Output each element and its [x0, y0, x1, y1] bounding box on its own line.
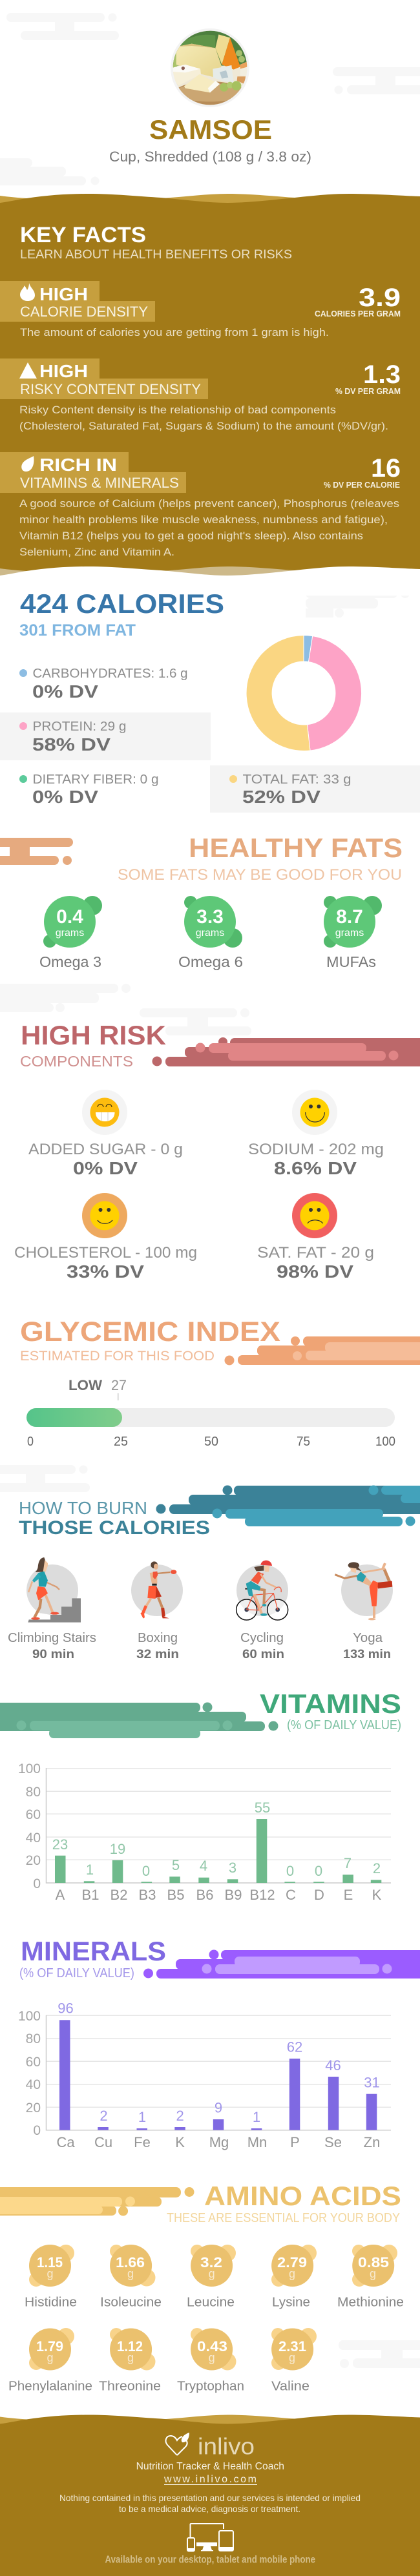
amino: isoleucine: g: [127, 2267, 134, 2280]
amino: histidine: 1.15: [37, 2254, 63, 2270]
activity: boxing: [131, 1561, 183, 1661]
bar chart: vitamins: D: [314, 1887, 324, 1903]
amino: histidine: Histidine: [25, 2296, 77, 2310]
fact: rich in vitamins and minerals: minor health problems like muscle weakness, numbness and fatigue),: [19, 514, 388, 526]
panel: high risk components: [14, 1020, 420, 1282]
panel: vitamins: [0, 1688, 401, 1903]
bar chart: vitamins: B6: [196, 1887, 213, 1903]
bubble: omega 3: Omega 3: [39, 953, 101, 970]
amino: histidine: g: [47, 2267, 54, 2280]
component: added sugar: [28, 1090, 183, 1178]
amino: phenylalanine: 1.79: [36, 2338, 63, 2354]
bar chart: minerals: 96: [58, 2000, 74, 2017]
bar chart: minerals: 1: [138, 2109, 146, 2125]
bar chart: minerals: 100: [18, 2009, 41, 2024]
subheading: ESTIMATED FOR THIS FOOD: [20, 1349, 215, 1364]
heading: how to burn: HOW TO BURN: [19, 1498, 147, 1518]
macro: total fat: TOTAL FAT: 33 g: [243, 773, 352, 787]
bar chart: vitamins: B12: [249, 1887, 275, 1903]
gauge scale: 25: [114, 1435, 128, 1449]
bar chart: minerals: 2: [176, 2108, 184, 2124]
bar chart: vitamins: 0: [33, 1876, 41, 1891]
amino: leucine: 3.2: [200, 2254, 222, 2270]
bar chart: vitamins: 20: [26, 1853, 41, 1868]
amino: methionine: g: [370, 2267, 376, 2280]
fact: rich in vitamins and minerals: A good source of Calcium (helps prevent cancer), Phosphorus (releaves: [19, 497, 399, 510]
amino: phenylalanine: Phenylalanine: [8, 2380, 92, 2394]
macro: total fat: 52% DV: [242, 787, 320, 807]
panel: footer: [0, 2415, 420, 2576]
disclaimer: [59, 2493, 361, 2514]
amino: phenylalanine: [8, 2328, 92, 2394]
bubble: omega 6: [178, 896, 243, 970]
subheading: (% OF DAILY VALUE): [287, 1718, 401, 1732]
gauge scale: 75: [297, 1435, 310, 1449]
bubble: omega 3: [39, 896, 102, 970]
heading: healthy fats: HEALTHY FATS: [189, 833, 403, 863]
bar chart: vitamins: 3: [229, 1860, 236, 1876]
gauge scale: [27, 1435, 395, 1449]
amino: tryptophan: Tryptophan: [177, 2380, 244, 2394]
subheading: SOME FATS MAY BE GOOD FOR YOU: [118, 866, 402, 884]
amino: phenylalanine: g: [47, 2351, 54, 2364]
macro: carbohydrates: [19, 667, 187, 701]
fact: calorie density: CALORIES PER GRAM: [315, 309, 401, 318]
bar chart: vitamins: 5: [172, 1857, 180, 1873]
fact: risky content density: (Cholesterol, Saturated Fat, Sugars & Sodium) to the amount (%DV/gr).: [19, 420, 388, 432]
heading: key facts: KEY FACTS: [20, 223, 146, 247]
serving size: Cup, Shredded (108 g / 3.8 oz): [109, 149, 311, 165]
bar chart: minerals: Se: [324, 2134, 342, 2150]
amino: leucine: Leucine: [187, 2296, 235, 2310]
fact: risky content density: % DV PER GRAM: [335, 386, 401, 396]
amino: valine: [271, 2328, 317, 2394]
macro: protein: [0, 712, 211, 760]
bar chart: vitamins: B9: [225, 1887, 242, 1903]
fact: calorie density: HIGH: [39, 284, 88, 304]
tagline: Nutrition Tracker & Health Coach: [136, 2461, 284, 2472]
component: saturated fat: SAT. FAT - 20 g: [257, 1244, 374, 1262]
amino: tryptophan: 0.43: [197, 2338, 227, 2354]
bar chart: vitamins: 0: [286, 1863, 294, 1879]
bar chart: minerals: 9: [215, 2100, 222, 2116]
subheading: LEARN ABOUT HEALTH BENEFITS OR RISKS: [20, 248, 292, 262]
heading: vitamins: VITAMINS: [260, 1688, 401, 1719]
bubble: omega 6: Omega 6: [178, 953, 243, 970]
macro: carbohydrates: 0% DV: [32, 681, 98, 701]
component: added sugar: ADDED SUGAR - 0 g: [28, 1141, 183, 1158]
bubble: mufas: grams: [335, 928, 364, 939]
bar chart: minerals: 40: [26, 2077, 41, 2092]
amino: valine: 2.31: [278, 2338, 306, 2354]
amino: threonine: [99, 2328, 161, 2394]
activity: climbing stairs: [8, 1557, 96, 1661]
bar chart: minerals: 2: [100, 2108, 108, 2124]
bar chart: minerals: Fe: [134, 2134, 151, 2150]
heading: glycemic index: GLYCEMIC INDEX: [20, 1316, 280, 1347]
fact: rich in vitamins and minerals: RICH IN: [39, 455, 117, 475]
fact: risky content density: [0, 358, 401, 432]
component: cholesterol: [14, 1193, 197, 1282]
component: cholesterol: CHOLESTEROL - 100 mg: [14, 1244, 197, 1262]
amino: threonine: 1.12: [117, 2338, 143, 2354]
fact: rich in vitamins and minerals: 16: [371, 454, 401, 483]
amino: isoleucine: 1.66: [116, 2254, 145, 2270]
fact: rich in vitamins and minerals: VITAMINS & MINERALS: [20, 475, 179, 491]
amino: threonine: g: [127, 2351, 134, 2364]
website link: www.inlivo.com: [163, 2474, 257, 2485]
bar chart: vitamins: 55: [255, 1800, 270, 1816]
bar chart: minerals: [18, 2000, 391, 2150]
subheading: (% OF DAILY VALUE): [19, 1966, 134, 1980]
bar chart: vitamins: 7: [344, 1855, 352, 1871]
bar chart: vitamins: 40: [26, 1831, 41, 1845]
amino: lysine: [271, 2245, 317, 2310]
bar chart: vitamins: B5: [167, 1887, 184, 1903]
food photo: assorted cheese: [170, 28, 250, 108]
heading: amino acids: AMINO ACIDS: [204, 2181, 401, 2211]
amino: isoleucine: [100, 2245, 162, 2310]
bar chart: minerals: P: [290, 2134, 300, 2150]
bar chart: minerals: 80: [26, 2031, 41, 2046]
bar chart: vitamins: 19: [110, 1841, 125, 1857]
bar chart: vitamins: B3: [139, 1887, 156, 1903]
bar chart: vitamins: 60: [26, 1807, 41, 1822]
bar chart: minerals: Cu: [94, 2134, 112, 2150]
panel: glycemic index: [20, 1316, 420, 1449]
bar chart: vitamins: 4: [200, 1858, 207, 1874]
macro: protein: PROTEIN: 29 g: [32, 720, 127, 734]
amino: threonine: Threonine: [99, 2380, 161, 2394]
donut chart: [246, 636, 362, 751]
activity: yoga: 133 min: [343, 1648, 391, 1661]
activity: boxing: 32 min: [136, 1648, 179, 1661]
fact: rich in vitamins and minerals: Vitamin B12 (helps you to get a good night's sleep). Also contains: [19, 530, 363, 542]
bar chart: vitamins: 23: [52, 1836, 68, 1853]
heading: minerals: MINERALS: [21, 1936, 166, 1966]
bar chart: minerals: Ca: [56, 2134, 75, 2150]
bar chart: minerals: 20: [26, 2101, 41, 2115]
icon: flame: [20, 283, 35, 301]
panel: header: [109, 28, 311, 165]
fact: calorie density: The amount of calories you are getting from 1 gram is high.: [20, 326, 329, 338]
component: sodium: 8.6% DV: [274, 1158, 357, 1178]
bar chart: minerals: 60: [26, 2055, 41, 2070]
marker: low 27: [68, 1377, 127, 1400]
activity: cycling: 60 min: [242, 1648, 284, 1661]
marker: low 27: LOW: [68, 1377, 102, 1393]
fact: calorie density: 3.9: [359, 284, 401, 312]
bar chart: vitamins: 2: [373, 1860, 381, 1876]
component: sodium: SODIUM - 202 mg: [248, 1141, 384, 1158]
subheading: components: COMPONENTS: [20, 1053, 133, 1070]
macro: carbohydrates: CARBOHYDRATES: 1.6 g: [32, 667, 187, 681]
macro: dietary fiber: [19, 773, 159, 807]
activity: climbing stairs: Climbing Stairs: [8, 1631, 96, 1645]
bubble: mufas: [324, 896, 382, 970]
bar chart: vitamins: B1: [82, 1887, 99, 1903]
bar chart: vitamins: [18, 1761, 391, 1903]
bar chart: vitamins: E: [344, 1887, 353, 1903]
amino: leucine: g: [209, 2267, 215, 2280]
bar chart: minerals: 0: [33, 2123, 41, 2138]
activity: yoga: [335, 1562, 393, 1661]
amino: isoleucine: Isoleucine: [100, 2296, 162, 2310]
activity: cycling: Cycling: [240, 1631, 284, 1645]
panel: healthy fats: [0, 833, 403, 970]
bar chart: vitamins: 0: [315, 1863, 322, 1879]
fact: rich in vitamins and minerals: % DV PER CALORIE: [324, 480, 400, 490]
availability note: Available on your desktop, tablet and mobile phone: [105, 2555, 315, 2566]
icon: warning triangle: [19, 362, 37, 379]
gauge bar: [26, 1408, 395, 1427]
title: SAMSOE: [149, 114, 272, 145]
bar chart: minerals: 1: [253, 2109, 260, 2125]
amino: leucine: [187, 2245, 236, 2310]
fact: risky content density: RISKY CONTENT DENSITY: [20, 381, 201, 397]
bubble: omega 3: grams: [56, 928, 84, 939]
component: saturated fat: 98% DV: [277, 1262, 353, 1282]
bar chart: minerals: Mn: [247, 2134, 267, 2150]
component: saturated fat: [257, 1193, 374, 1282]
bar chart: vitamins: A: [56, 1887, 65, 1903]
amino: valine: Valine: [271, 2380, 310, 2394]
logo: inlivo: inlivo: [198, 2433, 255, 2460]
amino: histidine: [25, 2245, 77, 2310]
activity: boxing: Boxing: [138, 1631, 178, 1645]
bubble: mufas: 8.7: [336, 906, 363, 928]
logo: inlivo: [166, 2433, 255, 2460]
marker: low 27: 27: [111, 1377, 127, 1393]
amino: lysine: Lysine: [272, 2296, 310, 2310]
bubble: omega 6: 3.3: [196, 906, 224, 928]
amino: methionine: 0.85: [358, 2254, 389, 2270]
amino: methionine: Methionine: [337, 2296, 404, 2310]
panel: amino acids: [0, 2181, 404, 2394]
fact: rich in vitamins and minerals: [0, 452, 401, 558]
icon: leaf: [21, 456, 34, 472]
panel: key facts: [0, 194, 420, 596]
subheading: calories from fat: 301 FROM FAT: [19, 621, 136, 639]
bar chart: vitamins: 100: [18, 1761, 41, 1776]
bar chart: minerals: Zn: [364, 2134, 380, 2150]
bar chart: vitamins: C: [286, 1887, 296, 1903]
activity: cycling: [236, 1561, 288, 1661]
macro: dietary fiber: DIETARY FIBER: 0 g: [32, 773, 159, 787]
macro: total fat: [210, 765, 420, 813]
amino: tryptophan: [177, 2328, 244, 2394]
amino: lysine: g: [289, 2267, 295, 2280]
amino: tryptophan: g: [209, 2351, 215, 2364]
bar chart: vitamins: K: [372, 1887, 382, 1903]
heading: calories: 424 CALORIES: [20, 588, 224, 619]
component: cholesterol: 33% DV: [67, 1262, 144, 1282]
activity: climbing stairs: 90 min: [32, 1648, 74, 1661]
disclaimer: to be a medical advice, diagnosis or treatment.: [119, 2504, 300, 2514]
bubble: omega 6: grams: [196, 928, 224, 939]
component: added sugar: 0% DV: [73, 1158, 138, 1178]
bar chart: vitamins: 80: [26, 1785, 41, 1800]
activity: yoga: Yoga: [353, 1631, 383, 1645]
gauge scale: 0: [27, 1435, 34, 1449]
subheading: THESE ARE ESSENTIAL FOR YOUR BODY: [167, 2211, 400, 2225]
icon: devices: [187, 2524, 233, 2551]
bubble: mufas: MUFAs: [326, 953, 376, 970]
macro: protein: 58% DV: [32, 734, 110, 754]
bar chart: minerals: 31: [364, 2075, 380, 2091]
fact: risky content density: Risky Content density is the relationship of bad components: [19, 404, 336, 416]
fact: risky content density: 1.3: [363, 360, 401, 389]
bar chart: vitamins: B2: [110, 1887, 127, 1903]
amino: valine: g: [289, 2351, 295, 2364]
heading: those calories: THOSE CALORIES: [19, 1517, 210, 1539]
disclaimer: Nothing contained in this presentation and our services is intended or implied: [59, 2493, 361, 2503]
bar chart: minerals: Mg: [209, 2134, 229, 2150]
bar chart: minerals: 62: [287, 2039, 302, 2055]
panel: minerals: [18, 1936, 420, 2150]
fact: calorie density: [0, 281, 401, 338]
panel: how to burn calories: [8, 1486, 420, 1661]
fact: rich in vitamins and minerals: Selenium, Zinc and Vitamin A.: [19, 546, 174, 558]
bar chart: minerals: 46: [325, 2057, 341, 2073]
panel: calories: [0, 588, 420, 813]
gauge scale: 50: [204, 1435, 218, 1449]
bubble: omega 3: 0.4: [56, 906, 83, 928]
bar chart: vitamins: 1: [86, 1862, 94, 1878]
heading: high risk: HIGH RISK: [21, 1020, 166, 1050]
bar chart: vitamins: 0: [142, 1863, 150, 1879]
amino: methionine: [337, 2245, 404, 2310]
fact: risky content density: HIGH: [39, 361, 88, 381]
amino: lysine: 2.79: [277, 2254, 307, 2270]
fact: calorie density: CALORIE DENSITY: [20, 304, 148, 320]
component: sodium: [248, 1090, 384, 1178]
bar chart: minerals: K: [175, 2134, 185, 2150]
macro: dietary fiber: 0% DV: [32, 787, 98, 807]
gauge scale: 100: [375, 1435, 395, 1449]
